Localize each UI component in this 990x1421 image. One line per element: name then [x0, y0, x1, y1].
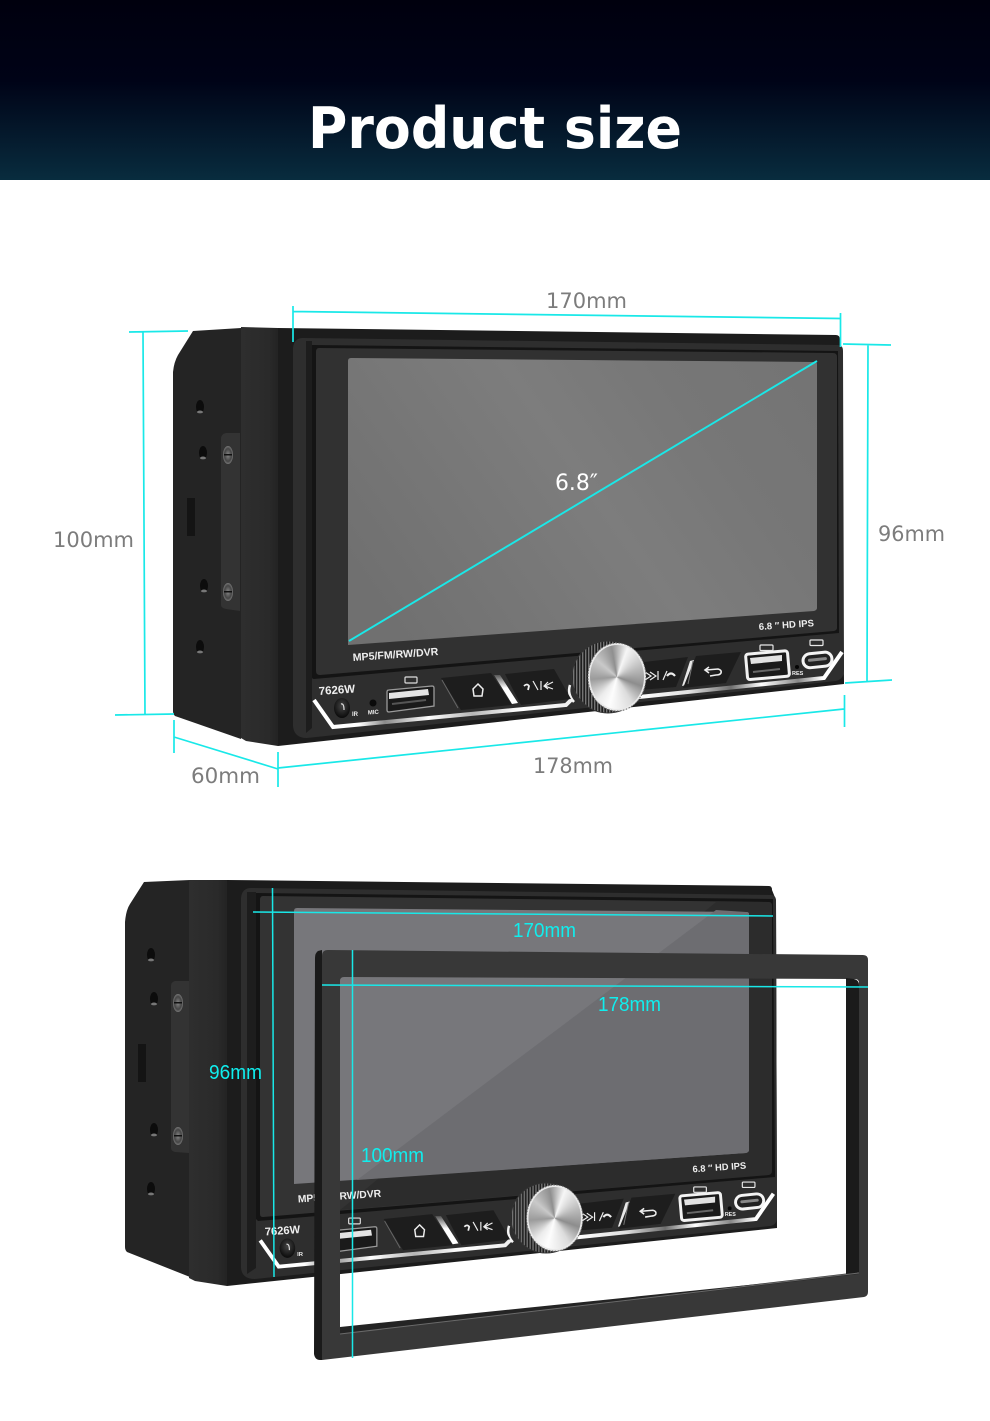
dimension 60mm: 60mm: [191, 764, 260, 788]
USB port right: [680, 1187, 722, 1221]
control panel: [260, 1161, 773, 1267]
chrome strip left: [260, 1239, 511, 1267]
model text: 7626W: [318, 683, 356, 698]
back button: [683, 652, 741, 688]
label 178mm: 178mm: [598, 993, 661, 1016]
USB port left: [387, 677, 434, 712]
header banner: [0, 0, 990, 180]
chrome strip left: [314, 699, 572, 727]
IR sensor: IR: [297, 1252, 304, 1258]
dimension 170mm: [293, 289, 840, 347]
chrome arc by knob: [569, 685, 574, 702]
dimension 96mm: [843, 344, 945, 683]
radio side panel: [125, 880, 227, 1286]
chrome strip right: [576, 1194, 773, 1237]
radio front body: [227, 880, 777, 1286]
label 6.8" HD IPS: 6.8 ″ HD IPS: [758, 618, 815, 633]
label 96mm: 96mm: [209, 1061, 262, 1084]
diagonal 6.8 inch: 6.8″: [555, 471, 598, 496]
phone/prev button: [435, 1210, 510, 1245]
dimensions: first view: [53, 289, 945, 788]
dimension 100mm: 100mm: [53, 528, 134, 552]
dimension 178mm: [278, 695, 844, 787]
line 100mm: [352, 950, 354, 1358]
dimension 60mm: [174, 720, 278, 788]
screen: [348, 358, 817, 645]
mic: [368, 700, 380, 716]
dimensions: second view: [209, 888, 868, 1358]
diagonal 6.8 inch: [349, 361, 817, 641]
reset: [792, 665, 804, 677]
screen: [294, 908, 749, 1184]
volume knob: [572, 641, 646, 713]
product: radio with mounting frame: [125, 880, 868, 1360]
USB-C port: [802, 640, 833, 668]
home button: [441, 673, 512, 710]
dimension 100mm: [53, 331, 188, 715]
product: radio three-quarter view: [173, 327, 844, 746]
chrome arc by knob: [508, 1226, 513, 1242]
USB port right: [745, 645, 790, 680]
back button: [619, 1194, 675, 1229]
label 6.8" HD IPS: 6.8 ″ HD IPS: [692, 1161, 746, 1174]
label MP5/FM/RW/DVR: MP5/FM/RW/DVR: [298, 1189, 382, 1205]
label MP5/FM/RW/DVR: MP5/FM/RW/DVR: [352, 646, 439, 664]
chrome strip right: [639, 652, 842, 697]
IR sensor: IR: [352, 712, 359, 718]
home button: [384, 1214, 453, 1250]
line 96mm outer: [272, 888, 274, 1277]
next/answer button: [639, 657, 694, 690]
title: Product size: [308, 96, 682, 162]
reset: [725, 1206, 736, 1218]
phone/prev button: [494, 669, 571, 705]
next/answer button: [576, 1199, 630, 1231]
dimension 96mm: 96mm: [878, 522, 945, 546]
IR sensor: [280, 1238, 304, 1258]
volume knob: [511, 1183, 583, 1253]
mounting frame: [314, 950, 868, 1360]
label 100mm: 100mm: [361, 1144, 424, 1167]
model text: 7626W: [264, 1224, 301, 1239]
reset: RES: [725, 1212, 736, 1218]
line 170mm: [253, 912, 773, 916]
IR sensor: [334, 698, 359, 718]
reset: RES: [792, 671, 804, 677]
USB port left: [331, 1218, 377, 1252]
radio side panel: [173, 327, 278, 746]
dimension 178mm: 178mm: [533, 754, 613, 778]
label 170mm: 170mm: [513, 919, 576, 942]
line 178mm: [322, 985, 868, 987]
mic: MIC: [368, 710, 380, 716]
radio front body: [278, 328, 844, 746]
USB-C port: [735, 1182, 764, 1210]
control panel: [314, 618, 842, 727]
dimension 170mm: 170mm: [546, 289, 627, 313]
